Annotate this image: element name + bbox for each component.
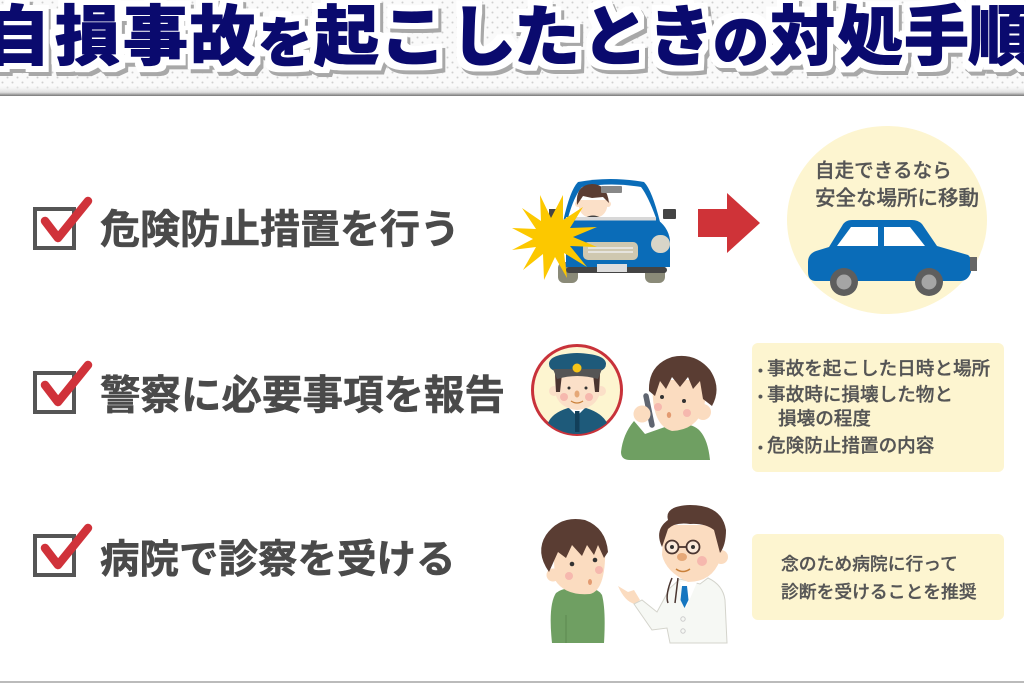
panel: report items: 損壊の程度 xyxy=(778,408,871,429)
step 2 heading: 警察に必要事項を報告 xyxy=(100,372,505,418)
step 3 heading xyxy=(35,528,456,582)
title xyxy=(0,0,1024,74)
panel: report items: • xyxy=(758,388,763,404)
callout text: 自走できるなら xyxy=(815,160,952,182)
panel: report items: • xyxy=(758,362,763,378)
step 1 heading: 危険防止措置を行う xyxy=(100,208,460,252)
title: を xyxy=(258,14,312,74)
panel: hospital advice: 念のため病院に行って xyxy=(781,554,958,574)
panel: report items: 事故を起こした日時と場所 xyxy=(767,358,991,379)
title: こしたとき xyxy=(380,0,714,74)
illustration: doctor xyxy=(618,505,728,643)
illustration: police officer xyxy=(532,346,622,434)
title: 起 xyxy=(314,0,379,73)
header band xyxy=(0,0,1024,96)
arrow xyxy=(698,193,760,253)
panel: hospital advice xyxy=(752,534,1004,620)
callout text: 安全な場所に移動 xyxy=(815,187,979,210)
panel: report items: 危険防止措置の内容 xyxy=(767,435,935,456)
icon: blue car xyxy=(808,220,977,296)
checkbox icon xyxy=(35,201,88,248)
panel: move to safe place xyxy=(787,126,987,314)
step 3 heading: 病院で診察を受ける xyxy=(100,538,456,582)
icon: impact star xyxy=(512,195,597,280)
illustration: man on phone xyxy=(621,356,717,460)
panel: report items: 事故時に損壊した物と xyxy=(767,384,953,405)
illustration: patient xyxy=(541,519,608,643)
panel: hospital advice: 診断を受けることを推奨 xyxy=(781,582,977,602)
panel: report items: • xyxy=(758,439,763,455)
panel: report items xyxy=(752,343,1004,472)
checkbox icon xyxy=(35,365,88,412)
title: の xyxy=(713,11,769,74)
checkbox icon xyxy=(35,528,88,575)
illustration: crashed car xyxy=(512,179,676,283)
